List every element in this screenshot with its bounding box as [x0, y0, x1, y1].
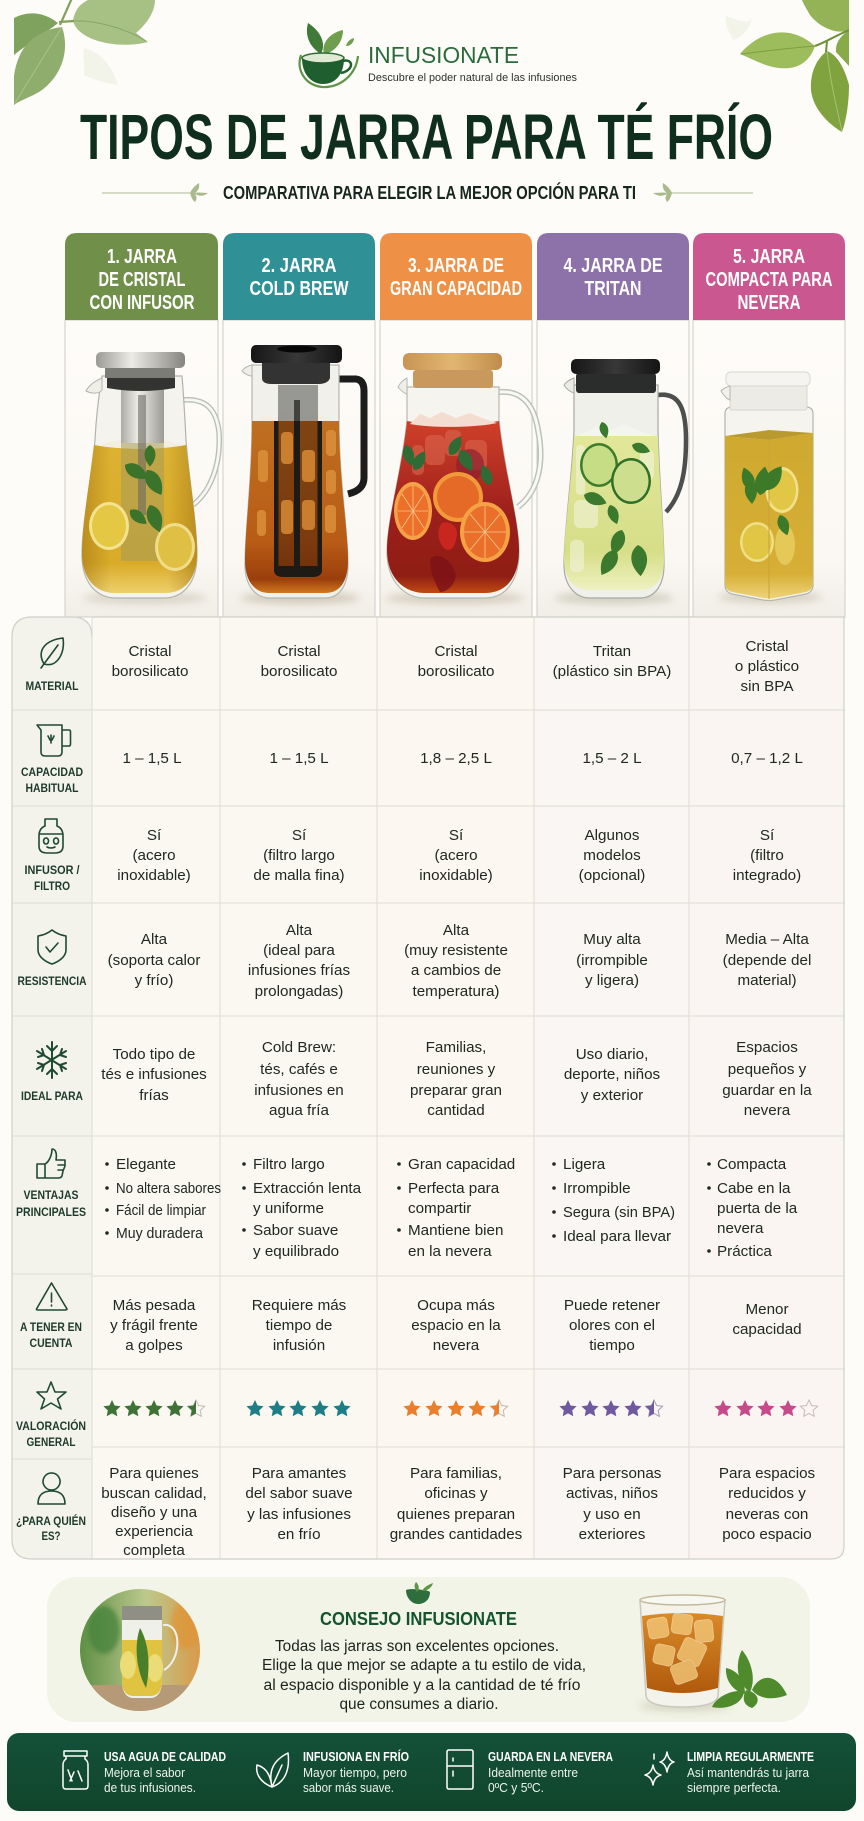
tagline: Descubre el poder natural de las infusiones — [368, 72, 577, 84]
row: para quien es: ES? — [42, 1529, 60, 1543]
row: material: Cristal — [128, 643, 172, 660]
row: para quien es: buscan calidad, — [101, 1485, 207, 1502]
column header 1: DE CRISTAL — [98, 269, 186, 291]
row: infusor / filtro — [24, 819, 801, 893]
row: material: Tritan — [593, 643, 631, 660]
row: ideal para: Cold Brew: — [262, 1039, 336, 1056]
row: ideal para: agua fría — [269, 1102, 330, 1119]
row: ventajas principales: puerta de la — [717, 1200, 798, 1217]
row: para quien es: grandes cantidades — [390, 1526, 523, 1543]
tip text: al espacio disponible y a la cantidad de té frío — [264, 1677, 580, 1694]
row: ventajas principales: No altera sabores — [116, 1180, 221, 1197]
row: capacidad habitual: 1 – 1,5 L — [269, 750, 329, 767]
row: para quien es: reducidos y — [728, 1485, 806, 1502]
row: resistencia: prolongadas) — [255, 983, 343, 1000]
icon: person — [38, 1473, 65, 1504]
row: resistencia: (muy resistente — [404, 942, 508, 959]
row: para quien es: ¿PARA QUIÉN — [16, 1513, 86, 1528]
row: resistencia: (soporta calor — [108, 952, 200, 969]
row: ventajas principales: Elegante — [116, 1156, 176, 1173]
row: resistencia: RESISTENCIA — [18, 974, 87, 988]
row: capacidad habitual: 1,5 – 2 L — [582, 750, 642, 767]
icon: star outline — [37, 1382, 66, 1409]
tip: guarda en la nevera — [447, 1750, 613, 1795]
row: para quien es — [16, 1465, 816, 1559]
row: a tener en cuenta: Requiere más — [252, 1297, 347, 1314]
row: para quien es: Para quienes — [109, 1465, 199, 1482]
icon: logo cup with leaves — [300, 23, 358, 87]
row: resistencia: Alta — [443, 922, 470, 939]
row: para quien es: completa — [123, 1542, 185, 1559]
row: resistencia: y ligera) — [585, 972, 639, 989]
row: ideal para: Familias, — [426, 1039, 486, 1056]
rating: 4 stars pink — [714, 1400, 818, 1416]
row: para quien es: oficinas y — [424, 1485, 488, 1502]
tip text: Elige la que mejor se adapte a tu estilo de vida, — [262, 1657, 586, 1674]
row: ideal para: Uso diario, — [576, 1046, 648, 1063]
tip: limpia regularmente — [645, 1750, 814, 1795]
row: ventajas principales: Práctica — [717, 1243, 772, 1260]
row: resistencia: (ideal para — [263, 942, 335, 959]
column header 5 — [693, 233, 845, 320]
row: infusor / filtro: integrado) — [733, 867, 801, 884]
row: material: o plástico — [735, 658, 799, 675]
tip: agua de calidad: USA AGUA DE CALIDAD — [104, 1750, 226, 1764]
panel: jar photo backgrounds — [65, 320, 845, 617]
row: capacidad habitual: 0,7 – 1,2 L — [731, 750, 803, 767]
row: para quien es: Para familias, — [410, 1465, 502, 1482]
tip: guarda en la nevera: 0ºC y 5ºC. — [488, 1781, 544, 1795]
panel: tips footer — [7, 1733, 856, 1811]
column header 4: TRITAN — [584, 278, 642, 300]
row: ventajas principales: Irrompible — [563, 1180, 631, 1197]
row: infusor / filtro: Sí — [147, 827, 162, 844]
row: resistencia: (depende del — [723, 952, 811, 969]
row: a tener en cuenta: tiempo de — [266, 1317, 332, 1334]
rating: 4.5 stars green — [103, 1400, 205, 1416]
row: infusor / filtro: inoxidable) — [117, 867, 191, 884]
row: resistencia — [18, 922, 811, 1000]
row: material: Cristal — [277, 643, 321, 660]
tip: agua de calidad: de tus infusiones. — [104, 1781, 196, 1795]
row: material: Cristal — [745, 638, 789, 655]
row: material: borosilicato — [261, 663, 337, 680]
row: ventajas principales: Extracción lenta — [253, 1180, 362, 1197]
row: ventajas principales: y equilibrado — [253, 1243, 339, 1260]
row: a tener en cuenta: nevera — [433, 1337, 480, 1354]
tip: infusiona en frio: INFUSIONA EN FRÍO — [303, 1749, 409, 1764]
row: infusor / filtro: Sí — [449, 827, 464, 844]
column header 2 — [223, 233, 375, 320]
tip: limpia regularmente: siempre perfecta. — [687, 1781, 781, 1795]
row: ventajas principales: Compacta — [717, 1156, 787, 1173]
row: ideal para: cantidad — [427, 1102, 485, 1119]
row: infusor / filtro: (acero — [434, 847, 478, 864]
icon: fridge — [447, 1750, 473, 1789]
row: resistencia: Media – Alta — [725, 931, 809, 948]
row: ideal para: Espacios — [736, 1039, 798, 1056]
row: ideal para: IDEAL PARA — [21, 1089, 83, 1103]
row: ventajas principales: compartir — [408, 1200, 471, 1217]
row: para quien es: Para personas — [563, 1465, 662, 1482]
column header 5: 5. JARRA — [733, 246, 805, 268]
row: a tener en cuenta: y frágil frente — [110, 1317, 198, 1334]
row: ideal para: pequeños y — [728, 1061, 807, 1078]
row: infusor / filtro: INFUSOR / — [24, 863, 80, 877]
row: a tener en cuenta: tiempo — [589, 1337, 635, 1354]
row: ventajas principales: Filtro largo — [253, 1156, 325, 1173]
tip: guarda en la nevera: Idealmente entre — [488, 1766, 578, 1780]
row: material: MATERIAL — [26, 679, 78, 693]
row: ventajas principales: y uniforme — [253, 1200, 324, 1217]
row: ventajas principales: VENTAJAS — [24, 1188, 78, 1202]
column header 5: NEVERA — [738, 292, 800, 314]
icon: sparkles — [645, 1752, 674, 1785]
jar 2: cold brew — [240, 345, 364, 604]
tip: limpia regularmente: Así mantendrás tu jarra — [687, 1766, 809, 1780]
column header 2: COLD BREW — [250, 278, 349, 300]
row: para quien es: neveras con — [726, 1506, 808, 1523]
row: para quien es: y las infusiones — [247, 1506, 351, 1523]
decorative leaves: top left — [13, 0, 155, 105]
column header 1 — [65, 233, 218, 320]
row: ideal para: reuniones y — [417, 1061, 496, 1078]
heading: CONSEJO INFUSIONATE — [320, 1609, 517, 1629]
row: resistencia: a cambios de — [411, 962, 501, 979]
row: infusor / filtro: FILTRO — [34, 879, 70, 893]
brand name: INFUSIONATE — [368, 42, 519, 68]
panel: consejo infusionate — [47, 1577, 810, 1722]
row: capacidad habitual — [21, 725, 803, 795]
row: ideal para: deporte, niños — [564, 1066, 661, 1083]
row: ideal para: frías — [139, 1087, 169, 1104]
row: ideal para: infusiones en — [254, 1082, 344, 1099]
row: resistencia: Alta — [286, 922, 313, 939]
row: ventajas principales: Sabor suave — [253, 1222, 338, 1239]
row: ventajas principales: Muy duradera — [116, 1225, 204, 1242]
row: ventajas principales: Ideal para llevar — [563, 1228, 671, 1245]
tip: infusiona en frio: sabor más suave. — [303, 1781, 394, 1795]
row: a tener en cuenta: olores con el — [569, 1317, 655, 1334]
tip: limpia regularmente: LIMPIA REGULARMENTE — [687, 1750, 814, 1764]
subtitle with sprigs: COMPARATIVA PARA ELEGIR LA MEJOR OPCIÓN PARA TI — [223, 182, 636, 203]
icon: leaf — [41, 638, 63, 668]
jar 1: glass with infuser — [82, 352, 219, 604]
row: infusor / filtro: (filtro largo — [263, 847, 335, 864]
column header 4: 4. JARRA DE — [564, 255, 662, 277]
row: valoracion general: VALORACIÓN — [16, 1418, 86, 1433]
row: para quien es: quienes preparan — [397, 1506, 515, 1523]
row: infusor / filtro: (filtro — [750, 847, 784, 864]
row: para quien es: del sabor suave — [245, 1485, 353, 1502]
row: para quien es: poco espacio — [722, 1526, 812, 1543]
row: ideal para: nevera — [744, 1102, 791, 1119]
row: a tener en cuenta: a golpes — [125, 1337, 183, 1354]
icon: snowflake — [37, 1042, 66, 1078]
photo: iced tea glass with leaves — [639, 1595, 787, 1711]
rating: 4.5 stars orange — [403, 1400, 508, 1416]
row: ventajas principales: Gran capacidad — [408, 1156, 515, 1173]
icon: thumbs up — [37, 1149, 65, 1178]
row: resistencia: y frío) — [135, 972, 173, 989]
panel: comparison table — [12, 617, 844, 1559]
row: ideal para: y exterior — [581, 1087, 643, 1104]
column header 3: GRAN CAPACIDAD — [390, 278, 522, 300]
icon: shield — [38, 930, 66, 964]
row: ideal para: tés e infusiones — [101, 1066, 207, 1083]
row: valoracion general: GENERAL — [26, 1435, 76, 1449]
row: ventajas principales: Perfecta para — [408, 1180, 500, 1197]
row: ideal para: guardar en la — [722, 1082, 812, 1099]
row: a tener en cuenta: A TENER EN — [20, 1320, 82, 1334]
row: infusor / filtro: Algunos — [585, 827, 640, 844]
row: ideal para: tés, cafés e — [260, 1061, 338, 1078]
icon: water bottle — [63, 1751, 88, 1789]
row: infusor / filtro: (opcional) — [579, 867, 645, 884]
row: ventajas principales: Fácil de limpiar — [116, 1202, 206, 1219]
row: resistencia: (irrompible — [576, 952, 648, 969]
tip: infusiona en frio — [257, 1749, 409, 1795]
row: material: borosilicato — [112, 663, 188, 680]
row: a tener en cuenta: espacio en la — [411, 1317, 501, 1334]
decorative leaves: top right — [726, 0, 849, 132]
icon: small logo — [406, 1582, 433, 1604]
row: ideal para: preparar gran — [410, 1082, 502, 1099]
row: ventajas principales: Cabe en la — [717, 1180, 791, 1197]
row: ventajas principales: Mantiene bien — [408, 1222, 503, 1239]
row: capacidad habitual: 1 – 1,5 L — [122, 750, 182, 767]
tip: infusiona en frio: Mayor tiempo, pero — [303, 1766, 407, 1780]
icon: leaf outline — [257, 1753, 288, 1787]
row: resistencia: Alta — [141, 931, 168, 948]
row: capacidad habitual: HABITUAL — [26, 781, 78, 795]
row: material: sin BPA — [741, 678, 794, 695]
row: material: (plástico sin BPA) — [553, 663, 671, 680]
icon: infuser jar — [39, 819, 63, 853]
row: a tener en cuenta: infusión — [273, 1337, 325, 1354]
rating: 4.5 stars purple — [559, 1400, 663, 1416]
row: a tener en cuenta: Ocupa más — [417, 1297, 495, 1314]
row: a tener en cuenta — [20, 1283, 802, 1354]
row: resistencia: temperatura) — [413, 983, 499, 1000]
row: material: borosilicato — [418, 663, 494, 680]
column header 3 — [380, 233, 532, 320]
row: para quien es: exteriores — [579, 1526, 646, 1543]
row: para quien es: y uso en — [583, 1506, 641, 1523]
row: material — [26, 638, 799, 695]
row: ideal para: Todo tipo de — [113, 1046, 195, 1063]
row: ideal para — [21, 1039, 812, 1119]
row: infusor / filtro: modelos — [583, 847, 641, 864]
row: resistencia: infusiones frías — [248, 962, 350, 979]
row: a tener en cuenta: Más pesada — [113, 1297, 196, 1314]
tip text: que consumes a diario. — [340, 1696, 498, 1713]
row: material: Cristal — [434, 643, 478, 660]
jar 5: compact — [718, 372, 822, 603]
jar 4: tritan — [554, 359, 686, 604]
icon: jug — [37, 725, 70, 756]
column header 1: 1. JARRA — [107, 246, 177, 268]
column header 2: 2. JARRA — [262, 255, 336, 277]
row: infusor / filtro: inoxidable) — [419, 867, 493, 884]
row: infusor / filtro: Sí — [292, 827, 307, 844]
row: infusor / filtro: Sí — [760, 827, 775, 844]
row: a tener en cuenta: capacidad — [732, 1321, 802, 1338]
row: para quien es: diseño y una — [111, 1504, 198, 1521]
row: ventajas principales: PRINCIPALES — [16, 1205, 86, 1219]
row: a tener en cuenta: Puede retener — [564, 1297, 660, 1314]
row: ventajas principales: Segura (sin BPA) — [563, 1204, 675, 1221]
logo — [300, 23, 577, 87]
row: ventajas principales — [16, 1149, 798, 1260]
row: valoracion general — [16, 1382, 818, 1449]
row: ventajas principales: Ligera — [563, 1156, 606, 1173]
row: capacidad habitual: 1,8 – 2,5 L — [420, 750, 492, 767]
row: para quien es: activas, niños — [566, 1485, 658, 1502]
row: ventajas principales: en la nevera — [408, 1243, 492, 1260]
row: capacidad habitual: CAPACIDAD — [21, 765, 83, 779]
row: infusor / filtro: (acero — [132, 847, 176, 864]
tip: agua de calidad — [63, 1750, 226, 1795]
row: infusor / filtro: de malla fina) — [253, 867, 345, 884]
row: resistencia: Muy alta — [583, 931, 641, 948]
row: para quien es: en frío — [277, 1526, 321, 1543]
row: para quien es: Para espacios — [719, 1465, 816, 1482]
column header 3: 3. JARRA DE — [408, 255, 504, 277]
row: a tener en cuenta: CUENTA — [30, 1336, 73, 1350]
row: para quien es: Para amantes — [252, 1465, 347, 1482]
tip text: Todas las jarras son excelentes opciones. — [275, 1638, 559, 1655]
row: ventajas principales: nevera — [717, 1220, 764, 1237]
row: para quien es: experiencia — [115, 1523, 193, 1540]
column header 1: CON INFUSOR — [90, 292, 195, 314]
column header 4 — [537, 233, 689, 320]
tip text — [262, 1638, 586, 1713]
tip: agua de calidad: Mejora el sabor — [104, 1766, 185, 1780]
photo: jar on table — [80, 1588, 200, 1711]
row: a tener en cuenta: Menor — [745, 1301, 789, 1318]
tip: guarda en la nevera: GUARDA EN LA NEVERA — [488, 1750, 613, 1764]
row: resistencia: material) — [737, 972, 797, 989]
rating: 5 stars teal — [246, 1400, 351, 1416]
icon: warning triangle — [36, 1283, 67, 1310]
jar 3: large capacity — [385, 353, 541, 604]
